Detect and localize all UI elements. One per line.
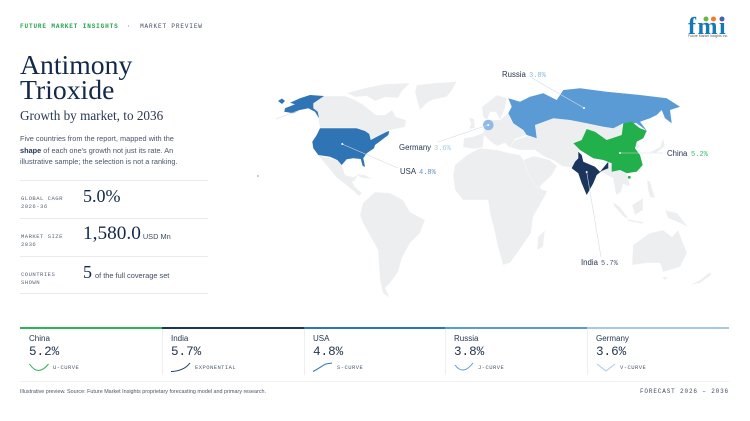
label: India: 5.7% — [601, 260, 619, 268]
stat label: SHOWN — [21, 278, 40, 286]
curve label: J-CURVE — [478, 364, 504, 371]
description: shape of each one's growth not just its rate. An — [20, 146, 173, 155]
growth rate: 3.8% — [454, 345, 484, 359]
label: USA: 4.8% — [419, 169, 437, 177]
curve icon: exponential — [171, 362, 190, 372]
label: Germany: 3.6% — [434, 145, 452, 153]
card: India — [171, 334, 236, 372]
stat: global CAGR — [21, 186, 120, 210]
leader lines — [276, 78, 663, 257]
stat value: 5.0% — [83, 186, 120, 206]
colour bars — [20, 327, 729, 329]
title — [20, 49, 132, 105]
label: Germany: Germany — [399, 143, 431, 152]
label: China: 5.2% — [691, 151, 709, 159]
stat label: MARKET SIZE — [21, 233, 63, 240]
anchor dots — [341, 107, 621, 173]
country name: Germany — [596, 334, 629, 343]
eyebrow: FUTURE MARKET INSIGHTS · MARKET PREVIEW — [20, 23, 203, 30]
label: Russia: Russia — [502, 70, 526, 79]
stat label — [21, 195, 63, 210]
forecast range: FORECAST 2026 – 2036 — [640, 388, 729, 395]
logo tagline: Future Market Insights Inc. — [688, 34, 728, 38]
country: China — [573, 122, 647, 179]
curve label: EXPONENTIAL — [195, 364, 236, 371]
stat: countries shown — [21, 262, 170, 286]
curve icon: J — [454, 362, 474, 370]
label: India — [581, 258, 619, 268]
curve icon: U — [29, 364, 49, 371]
label: USA: USA — [400, 167, 417, 176]
curve label: V-CURVE — [620, 364, 646, 371]
description: Five countries from the report, mapped with the — [20, 134, 174, 143]
label: USA — [400, 167, 437, 177]
country: USA — [257, 95, 389, 177]
card: Russia — [454, 334, 504, 371]
stat: market size — [21, 223, 171, 248]
curve icon: V — [596, 364, 616, 372]
country: Germany — [483, 120, 494, 130]
country name: China — [29, 334, 50, 343]
stat label: GLOBAL CAGR — [21, 195, 63, 202]
label: Germany — [399, 143, 452, 153]
growth rate: 5.7% — [171, 345, 201, 359]
logo wordmark: fmi — [688, 14, 727, 40]
subtitle: Growth by market, to 2036 — [20, 108, 163, 123]
stat label — [21, 233, 63, 248]
label: China — [667, 149, 709, 159]
curve icon: S — [312, 362, 332, 372]
stat label: 2026-36 — [21, 202, 48, 210]
description: illustrative sample; the selection is not a ranking. — [20, 157, 178, 166]
growth rate: 5.2% — [29, 345, 59, 359]
card: USA — [312, 334, 363, 372]
description — [20, 134, 178, 166]
stat label — [21, 271, 55, 286]
card: Germany — [596, 334, 646, 372]
growth rate: 4.8% — [313, 345, 343, 359]
country name: Russia — [454, 334, 478, 343]
title: Trioxide — [20, 74, 114, 105]
label: China: China — [667, 149, 688, 158]
source note: Illustrative preview. Source: Future Market Insights proprietary forecasting model and primary research. — [20, 389, 266, 395]
country: India — [572, 152, 608, 195]
logo coloured dots — [704, 16, 724, 22]
label: Russia — [502, 70, 547, 80]
stat value: 1,580.0 USD Mn — [83, 223, 171, 244]
label: India: India — [581, 258, 599, 267]
logo: fmi — [688, 14, 728, 40]
card: China — [29, 334, 79, 371]
curve label: U-CURVE — [53, 364, 79, 371]
country name: India — [171, 334, 188, 343]
stat label: COUNTRIES — [21, 271, 55, 278]
grey land masses — [313, 82, 711, 298]
country name: USA — [313, 334, 329, 343]
country: Russia — [508, 88, 680, 138]
stat label: 2036 — [21, 240, 36, 248]
growth rate: 3.6% — [596, 345, 626, 359]
stat value: 5 of the full coverage set — [83, 262, 169, 282]
curve label: S-CURVE — [337, 364, 363, 371]
title: Antimony — [20, 49, 132, 80]
label: Russia: 3.8% — [529, 72, 547, 80]
